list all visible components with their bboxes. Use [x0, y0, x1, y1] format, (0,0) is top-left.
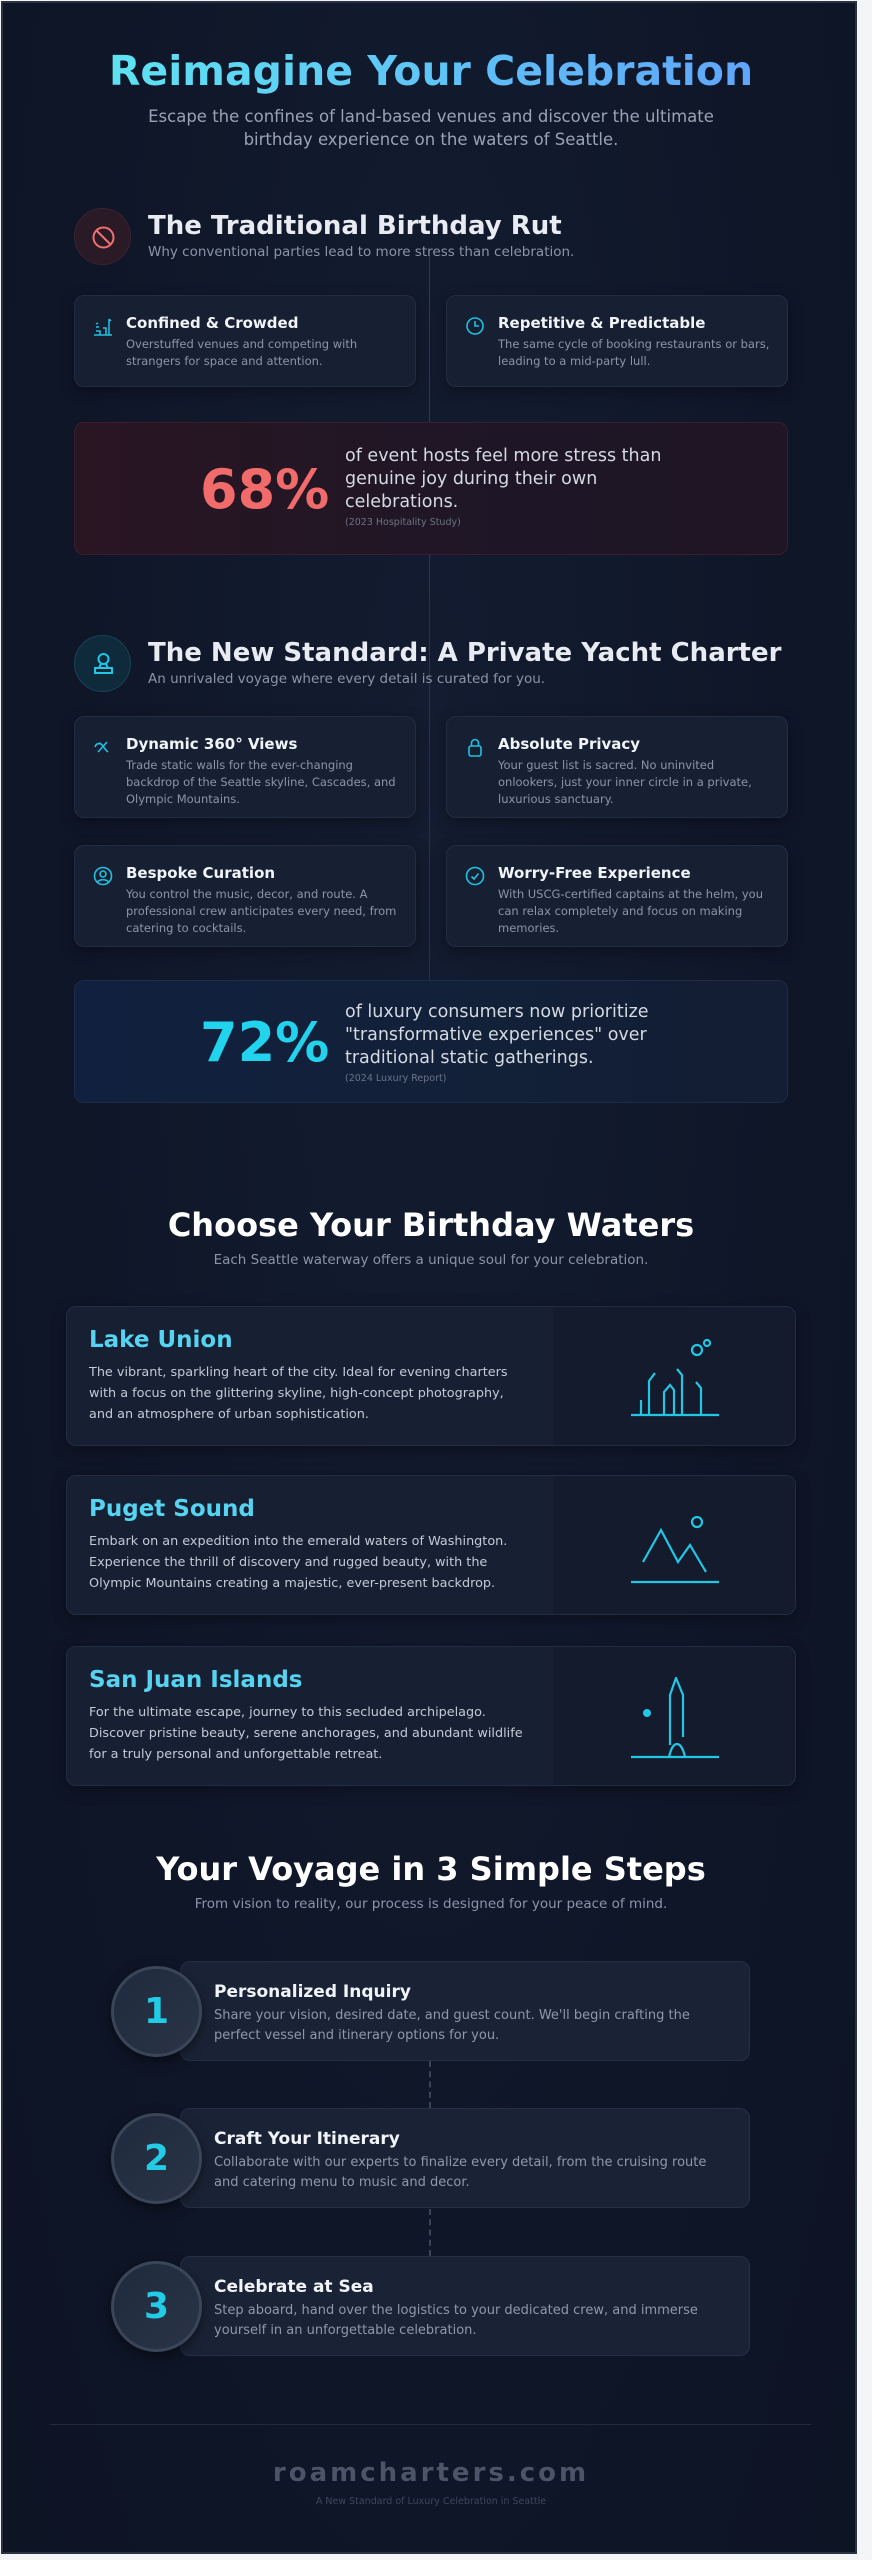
icon: person: [94, 866, 112, 886]
card: Puget Sound: Experience the thrill of discovery and rugged beauty, with the: [89, 1555, 487, 1570]
card: Lake Union: Lake Union: [89, 1327, 233, 1353]
text: 1: [144, 1991, 169, 2032]
stat: 68%: genuine joy during their own: [345, 469, 597, 489]
card: views: [74, 716, 416, 818]
text: Each Seattle waterway offers a unique soul for your celebration.: [214, 1252, 648, 1268]
heading: The Traditional Birthday Rut: [148, 211, 562, 241]
icon: captain stamp: [74, 635, 131, 692]
card: Puget Sound: Olympic Mountains creating a majestic, ever-present backdrop.: [89, 1576, 495, 1591]
waters heading: Choose Your Birthday Waters: [168, 1206, 694, 1244]
step 1: Share your vision, desired date, and guest count. We'll begin crafting the: [214, 2008, 690, 2023]
step 1: perfect vessel and itinerary options for you.: [214, 2028, 499, 2043]
card: San Juan Islands: For the ultimate escape, journey to this secluded archipelago.: [89, 1705, 486, 1720]
stat: 72%: "transformative experiences" over: [345, 1025, 647, 1045]
stat: 72%: of luxury consumers now prioritize: [345, 1002, 649, 1022]
card: San Juan Islands: Discover pristine beauty, serene anchorages, and abundant wildlife: [89, 1726, 523, 1741]
card: privacy: luxurious sanctuary.: [498, 792, 614, 806]
subtitle: Escape the confines of land-based venues and discover the ultimate: [148, 107, 714, 126]
card: Puget Sound: Embark on an expedition into the emerald waters of Washington.: [89, 1534, 507, 1549]
card: repetitive: The same cycle of booking restaurants or bars,: [498, 337, 769, 351]
card: Puget Sound: [66, 1475, 796, 1615]
card: Lake Union: and an atmosphere of urban sophistication.: [89, 1407, 369, 1422]
icon: skyline: [631, 1338, 719, 1416]
card: worry-free: Worry-Free Experience: [498, 864, 691, 882]
steps heading: Your Voyage in 3 Simple Steps: [156, 1850, 706, 1888]
title: Reimagine Your Celebration: [109, 47, 753, 95]
step 3: [180, 2256, 750, 2356]
step 3: yourself in an unforgettable celebration.: [214, 2323, 477, 2338]
card: San Juan Islands: [66, 1646, 796, 1786]
icon: lock: [468, 738, 482, 757]
card: Lake Union: with a focus on the glittering skyline, high-concept photography,: [89, 1386, 504, 1401]
section 2 header: An unrivaled voyage where every detail is curated for you.: [148, 671, 545, 687]
card: confined: Overstuffed venues and competing with: [126, 337, 357, 351]
step 2: Collaborate with our experts to finalize every detail, from the cruising route: [214, 2155, 706, 2170]
stat: 68%: (2023 Hospitality Study): [345, 517, 461, 528]
text: 2: [144, 2138, 169, 2179]
card: repetitive: leading to a mid-party lull.: [498, 354, 650, 368]
card: curation: You control the music, decor, and route. A: [126, 887, 367, 901]
card: Lake Union: The vibrant, sparkling heart of the city. Ideal for evening charters: [89, 1365, 508, 1380]
card: views: Olympic Mountains.: [126, 792, 240, 806]
card: confined: strangers for space and attention.: [126, 354, 323, 368]
stat: 68%: 68%: [200, 458, 329, 521]
card: curation: [74, 845, 416, 947]
stat: 68%: celebrations.: [345, 492, 458, 512]
card: Puget Sound: Puget Sound: [89, 1496, 255, 1522]
section 1 header: [74, 208, 574, 265]
icon: 360: [94, 742, 108, 752]
icon: clock: [466, 317, 484, 335]
card: curation: professional crew anticipates every need, from: [126, 904, 396, 918]
card: privacy: Absolute Privacy: [498, 735, 640, 753]
step 1: Personalized Inquiry: [214, 1982, 411, 2002]
footer: roamcharters.com: [273, 2458, 589, 2488]
card: worry-free: memories.: [498, 921, 559, 935]
card: worry-free: With USCG-certified captains at the helm, you: [498, 887, 763, 901]
card: privacy: Your guest list is sacred. No uninvited: [498, 758, 714, 772]
card: curation: Bespoke Curation: [126, 864, 275, 882]
step 2: Craft Your Itinerary: [214, 2129, 400, 2149]
icon: check: [466, 866, 484, 886]
stat: 68%: of event hosts feel more stress than: [345, 446, 661, 466]
card: confined: [74, 295, 416, 387]
card: Lake Union: [66, 1306, 796, 1446]
card: views: Trade static walls for the ever-changing: [126, 758, 353, 772]
text: A New Standard of Luxury Celebration in Seattle: [316, 2496, 546, 2507]
icon: prohibited: [74, 208, 131, 265]
section 1 header: Why conventional parties lead to more stress than celebration.: [148, 244, 574, 260]
subtitle: [148, 107, 714, 149]
card: San Juan Islands: San Juan Islands: [89, 1667, 302, 1693]
text: 3: [144, 2286, 169, 2327]
card: repetitive: [446, 295, 788, 387]
stat: 72%: 72%: [200, 1011, 329, 1074]
card: worry-free: [446, 845, 788, 947]
card: views: Dynamic 360° Views: [126, 735, 297, 753]
card: curation: catering to cocktails.: [126, 921, 246, 935]
text: From vision to reality, our process is designed for your peace of mind.: [195, 1896, 667, 1912]
step 2: [180, 2108, 750, 2208]
stat: 72%: (2024 Luxury Report): [345, 1073, 446, 1084]
section 2 header: [74, 635, 782, 692]
card: San Juan Islands: for a truly personal and unforgettable retreat.: [89, 1747, 382, 1762]
step 3: Step aboard, hand over the logistics to your dedicated crew, and immerse: [214, 2303, 698, 2318]
icon: crowd: [94, 318, 112, 336]
card: confined: Confined & Crowded: [126, 314, 298, 332]
card: privacy: onlookers, just your inner circle in a private,: [498, 775, 752, 789]
heading: The New Standard: A Private Yacht Charter: [148, 638, 781, 668]
card: views: backdrop of the Seattle skyline, Cascades, and: [126, 775, 396, 789]
stat: 72%: traditional static gatherings.: [345, 1048, 594, 1068]
step 2: and catering menu to music and decor.: [214, 2175, 470, 2190]
card: worry-free: can relax completely and focus on making: [498, 904, 742, 918]
step 3: Celebrate at Sea: [214, 2277, 374, 2297]
stat: 68%: [74, 422, 788, 555]
stat: 72%: [74, 980, 788, 1103]
icon: lighthouse: [631, 1677, 719, 1758]
icon: mountains: [631, 1516, 719, 1584]
card: privacy: [446, 716, 788, 818]
subtitle: birthday experience on the waters of Seattle.: [244, 130, 618, 149]
step 1: [180, 1961, 750, 2061]
card: repetitive: Repetitive & Predictable: [498, 314, 705, 332]
